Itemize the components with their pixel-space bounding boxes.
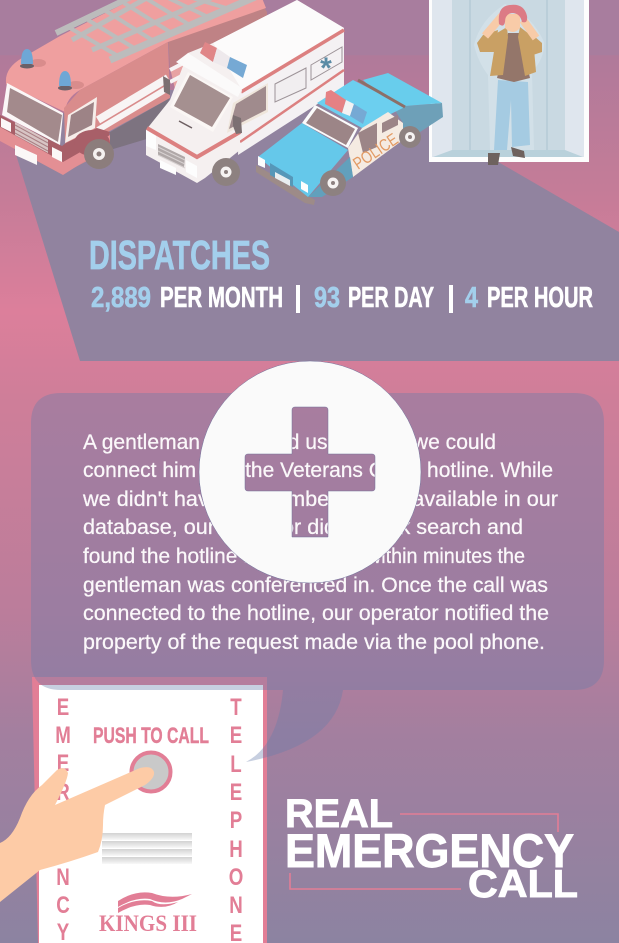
phone label: telephone: O [229, 864, 243, 891]
dispatch statistics [91, 282, 593, 314]
icon: white circle with medical cross [199, 361, 421, 583]
heading: dispatches: DISPATCHES [89, 232, 270, 278]
story text: A gentleman requested us to see if we could [83, 431, 496, 454]
story text: we didn't have the number readily available in our [82, 488, 558, 511]
push to call label: PUSH TO CALL [93, 723, 209, 748]
title: CALL [468, 863, 578, 906]
phone label: emergency: C [56, 892, 70, 919]
story text: connected to the hotline, our operator notified the [83, 602, 549, 625]
emergency phone panel [32, 677, 267, 943]
ambulance [146, 0, 344, 186]
logo: kings iii: KINGS III [99, 911, 197, 936]
elevator [429, 0, 589, 165]
phone label: telephone: N [229, 892, 243, 919]
title: REAL [285, 792, 393, 836]
phone label: emergency: E [57, 836, 69, 863]
icon: star of life: * [320, 52, 332, 85]
panel: dispatches backdrop [13, 90, 619, 361]
dispatch statistics: 93 [314, 282, 340, 314]
dispatch statistics: PER DAY [348, 282, 434, 314]
police car [256, 73, 443, 205]
phone label: emergency: M [55, 722, 71, 749]
call button [132, 752, 170, 792]
dispatch statistics: 4 [465, 282, 478, 314]
speech bubble [31, 393, 604, 762]
phone label: emergency: N [56, 864, 70, 891]
fire truck [0, 0, 267, 175]
person in elevator [474, 4, 544, 165]
police label: POLICE [350, 130, 402, 173]
title [285, 792, 578, 906]
title: EMERGENCY [285, 824, 574, 877]
phone label: telephone: H [229, 836, 243, 863]
phone label: emergency: G [56, 807, 70, 834]
phone label: telephone [229, 694, 243, 943]
ladder [56, 0, 262, 60]
decorative title frame [290, 814, 558, 889]
dispatch statistics: PER MONTH [160, 282, 283, 314]
story text: found the hotline and [83, 545, 278, 568]
story text: within minutes the [366, 545, 525, 568]
story text: connect him with the Veterans Crisis hotline. While [83, 459, 553, 482]
story text: property of the request made via the pool phone. [83, 631, 545, 654]
dispatch statistics: 2,889 [91, 282, 151, 314]
icon: beacon lights [20, 49, 84, 90]
phone label: telephone: E [230, 722, 242, 749]
story text: database, our operator did a quick search and [83, 516, 523, 539]
phone label: emergency: E [57, 694, 69, 721]
hand pressing button [0, 767, 154, 902]
phone label: emergency [55, 694, 71, 943]
phone label: emergency: R [56, 779, 70, 806]
phone label: emergency: E [57, 750, 69, 777]
story text: gentleman was conferenced in. Once the call was [83, 574, 548, 597]
logo: kings iii [99, 892, 197, 936]
story text [82, 431, 558, 654]
phone label: telephone: T [230, 694, 242, 721]
phone label: telephone: P [230, 807, 242, 834]
phone label: telephone: L [230, 751, 242, 778]
phone label: telephone: E [230, 779, 242, 806]
ambulance light bar [200, 42, 247, 78]
speaker grille [102, 833, 192, 864]
